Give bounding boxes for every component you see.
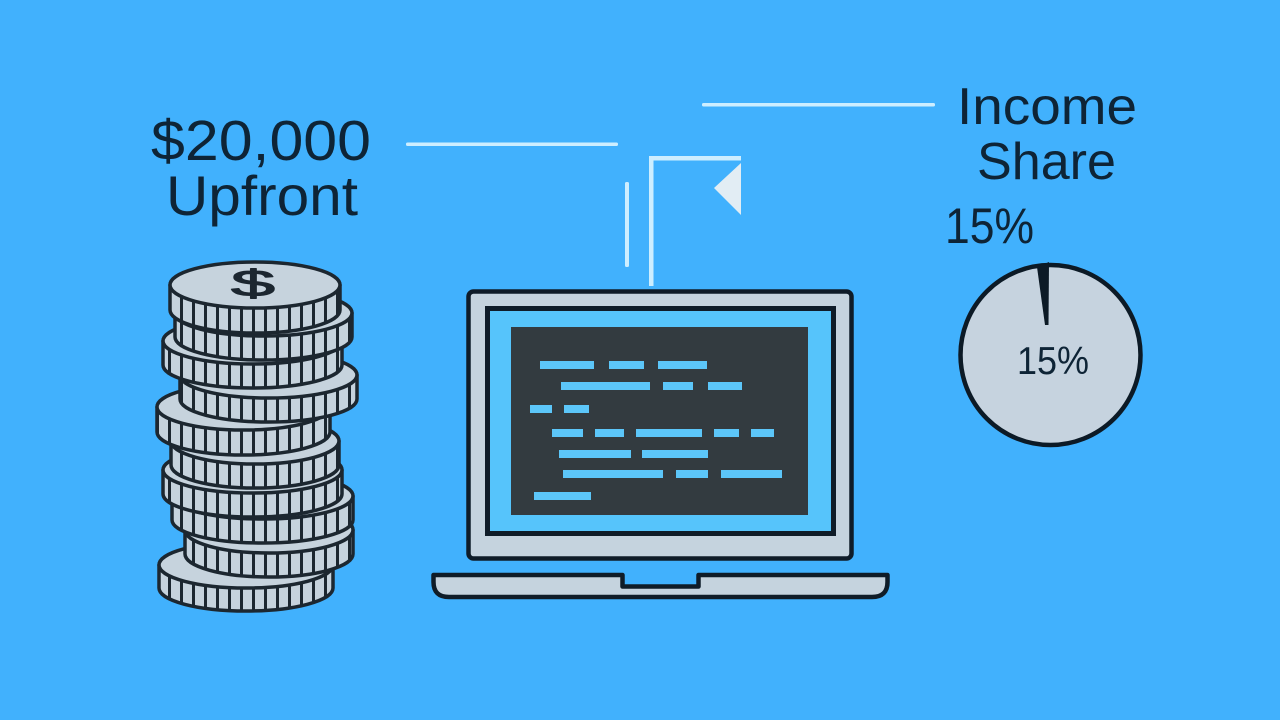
connector line: right — [702, 103, 935, 106]
code lines — [530, 361, 782, 500]
heading: Income Share: Share — [977, 133, 1116, 191]
coin 8 — [172, 473, 353, 543]
coin 4 — [180, 352, 357, 422]
screen — [488, 308, 834, 534]
coin 6 — [171, 418, 339, 488]
connector line: left — [406, 142, 618, 146]
laptop lid — [468, 292, 852, 558]
heading: $20,000 Upfront: Upfront — [166, 164, 358, 227]
coin 1 — [170, 262, 340, 333]
coin 9 — [185, 507, 353, 577]
pie label: 15% — [1017, 340, 1089, 383]
coin 5 — [157, 384, 330, 455]
heading: $20,000 Upfront: $20,000 — [151, 109, 371, 173]
heading: $20,000 Upfront — [151, 109, 371, 227]
pie chart: 15% — [960, 262, 1140, 445]
icon: laptop — [434, 292, 888, 597]
coin 3 — [163, 318, 342, 388]
coin 2 — [175, 290, 352, 360]
coin 7 — [163, 447, 342, 517]
icon: stack of coins — [157, 262, 357, 611]
label: 15% above pie: 15% — [945, 198, 1034, 254]
laptop base — [434, 575, 888, 597]
heading: Income Share: Income — [957, 78, 1137, 136]
dollar sign on top coin: $ — [231, 263, 275, 304]
icon: flag on laptop — [649, 156, 741, 286]
connector line: short vertical — [625, 182, 629, 267]
code panel — [511, 327, 808, 515]
heading: Income Share — [957, 78, 1137, 191]
coin 10 — [159, 542, 333, 611]
pie wedge marker — [1037, 262, 1049, 325]
